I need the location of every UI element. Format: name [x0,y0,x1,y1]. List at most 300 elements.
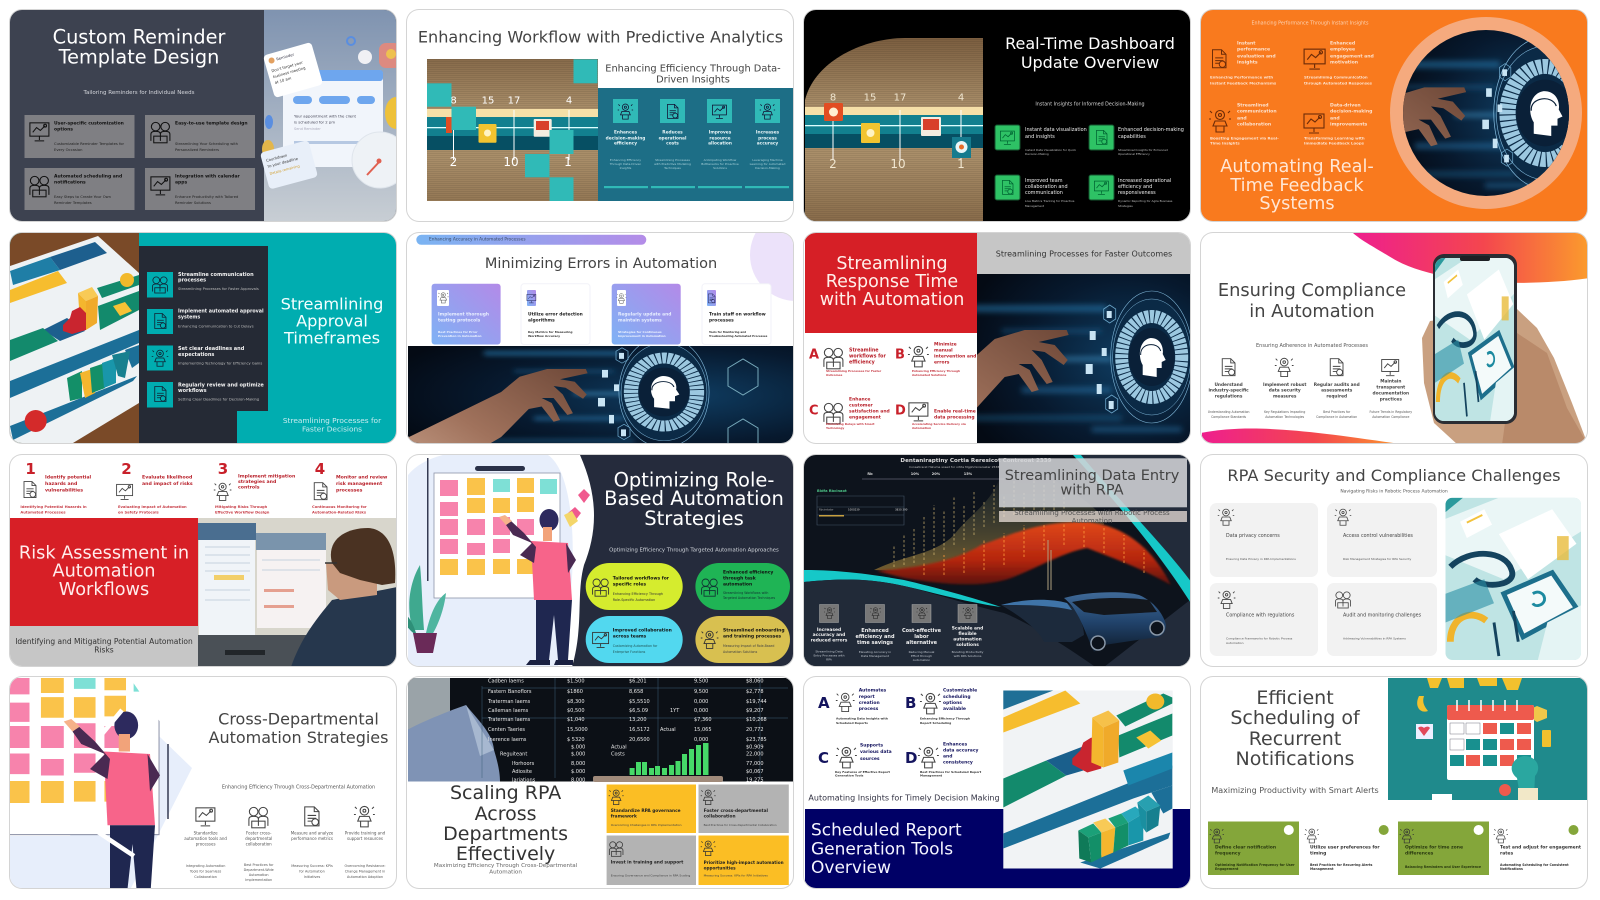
column: efficiency: Elevating Accuracy in [859,650,891,654]
photo: financial table on screen: Reguiteant [500,751,527,757]
item D [905,741,982,777]
step 3: controls [238,484,260,490]
box: automated scheduling [24,168,134,210]
title block: with Automation [820,290,964,310]
item: increased operational efficiency [1089,175,1173,208]
item D: Automation [912,426,931,430]
item A [818,687,888,724]
photo: 3D reminder interface: Send Reminder [294,127,321,131]
tile: notification frequency: Engagement [1215,866,1239,870]
column: scalable: with RPA Solutions [954,654,982,658]
timeline image: 15 [481,96,494,106]
chart image: particle terrain [874,455,1192,667]
tile: notification frequency: Optimizing Notification Frequency for User [1215,862,1295,866]
step 2: on Safety Protocols [118,510,159,514]
box: calendar integration: Enhance Productivity with Tailored [175,195,238,199]
photo: financial table on screen: Traterman Iaems [486,698,530,704]
column: audits: Regular audits and [1314,382,1360,388]
box: user-specific customization [24,115,134,158]
illustration: person at sticky-note board [400,450,590,666]
card: testing protocols: Implement thorough [438,311,488,317]
panel: insights: Insights [619,166,631,170]
panel: insights: Improves [708,130,731,136]
step 4: 4 [315,460,325,478]
title: RPA Security and Compliance Challenges [1227,466,1561,485]
photo: financial table on screen: $8,060 [746,678,763,684]
photo: 3D reminder interface: is scheduled for 2 pm [294,120,335,124]
photo: 3D reminder interface: Reminder [276,52,295,62]
item D: D [895,403,906,418]
subtitle: Maximizing Efficiency Through Cross-Departmental [433,862,577,868]
column: regulations: Understand [1214,382,1243,388]
subtitle box: Streamlining Processes with Robotic Process [1014,509,1170,517]
title block: Generation Tools [811,839,953,859]
step 3: Implement mitigation [238,474,295,480]
photo: financial table on screen: $23,785 [746,736,766,742]
timeline image: 2 [829,157,837,171]
dark list panel [139,246,268,444]
item C: C [818,748,829,766]
panel: Scheduled Report Generation Tools Overview [804,677,1190,888]
item B: options [943,700,962,706]
step 1: Identify potential [45,474,92,480]
item C: Minimizing Delays with Smart [826,422,875,426]
item: streamline communication [147,272,259,297]
item: streamlined communication: Streamlined [1237,102,1269,108]
item C: satisfaction and [849,408,890,414]
card: testing protocols [431,283,500,344]
column: cost: alternative [906,640,938,646]
panel: Minimizing Errors in Automation [407,232,793,443]
tile: audit: Addressing Vulnerabilities in RPA Systems [1343,637,1406,641]
column: training: Overcoming Resistance: [344,864,386,868]
column: training [344,806,386,878]
column: documentation: Maintain [1380,378,1401,384]
box: automated scheduling: notifications [54,180,86,186]
item: increased operational efficiency: Increased operational [1118,178,1171,184]
title [53,26,225,68]
photo: financial table on screen: Centen Taeries [488,726,525,732]
image: teal calendar illustration [1388,678,1590,800]
photo: financial table on screen: $0,500 [566,707,584,713]
step 4: processes [336,488,363,494]
chart labels: Bldfa Rbcinaot [817,489,847,493]
timeline image: 1 [564,155,571,169]
column: data security: Automation Technologies [1265,414,1305,418]
tile: training [606,835,696,884]
decorative lavender circle [750,208,842,300]
panel: RPA Security and Compliance Challenges [1201,455,1587,666]
column: foster: Automation [249,872,269,876]
step 3: Effective Workflow Design [215,510,270,514]
photo: financial table on screen: 0,000 [694,736,708,742]
column: standardize: processes [196,841,216,846]
title block: Workflows [59,580,149,600]
item: data-driven decision-making: decision-making [1330,108,1372,114]
step 2: 2 [121,460,132,478]
column: accuracy: Streamlining Data [815,650,843,654]
card: testing protocols: Best Practices for Error [438,330,478,334]
column: training: Automation Adoption [347,874,383,878]
tile: audit [1327,583,1437,656]
tile: data privacy: Data privacy concerns [1226,533,1280,539]
item: data-driven decision-making: Immediate Feedback Loops [1304,140,1365,146]
timeline image: 10 [890,157,906,171]
title: Recurrent [1249,728,1341,750]
title: Scheduling of [1230,706,1361,728]
column: cost: Automation [913,658,930,662]
panel: Optimizing Role-Based Automation Strategies [407,455,793,666]
photo: financial table on screen: $6,5.09 [628,707,648,713]
tile: time zones: Optimize for time zone [1405,844,1463,850]
item: review workflows [147,382,264,407]
eyebrow: Enhancing Performance Through Instant Insights [1252,20,1369,26]
column: regulations [1208,358,1250,418]
image: isometric chart [1003,690,1173,868]
column: accuracy [811,604,848,662]
box: user-specific customization: Every Occasion [54,148,83,152]
oval: tailored workflows [585,563,682,610]
step 2 [117,460,193,514]
tile: user preferences: Utilize user preferences for [1310,844,1380,850]
tile: access control: Risk Management Strategies for RPA Security [1343,557,1411,561]
timeline image: 2 [449,155,457,169]
box: automated scheduling: Automated scheduling and [54,174,122,180]
photo: financial table on screen: 8,658 [628,688,643,694]
photo: financial table on screen: $.000 [570,744,585,750]
title: Across [474,802,536,824]
item: increased operational efficiency: Strategies [1118,204,1133,208]
timeline image [805,38,983,221]
panel: insights: decision-making [605,136,645,142]
column: regulations: Compliance Standards [1211,414,1246,418]
subtitle: Maximizing Productivity with Smart Alerts [1211,786,1379,794]
column: cost: Effort through [911,654,932,658]
panel: Automating Real-Time Feedback Systems [1201,10,1587,220]
title block [804,808,1193,890]
photo: hand and headset [977,274,1190,443]
subtitle: Automating Insights for Timely Decision Making [808,793,1000,802]
card: update systems: maintain systems [618,317,662,323]
item B [895,341,976,376]
item: data-driven decision-making [1304,102,1372,146]
item: automated approval: Implement automated approval [178,308,264,314]
oval: streamlined onboarding [695,616,790,663]
panel: insights: Leveraging Machine [752,158,782,162]
item: enhanced decision-making: Streamlined Insights for Enhanced [1118,148,1168,152]
photo: financial table on screen: Actual [610,744,626,750]
card: error detection: algorithms [528,317,555,323]
column: scalable: automation [953,636,982,642]
chart labels: 1000239 [848,508,860,512]
chart labels: Dentaniraptiny Cortia Reresicot Contreoat 2339 [900,458,1052,464]
title: Departments [443,822,568,844]
oval: enhanced efficiency: Streamlining Workflows with [722,591,768,595]
timeline image: 1 [957,157,965,171]
photo: financial table on screen: $8,300 [566,698,584,704]
column: measure: for Automation [299,869,325,873]
item C: Enhance [849,396,870,402]
oval: streamlined onboarding: and training processes [722,634,781,640]
item: enhanced employee engagement: motivation [1330,60,1358,66]
panel: insights: Bottlenecks for Proactive [701,162,738,166]
item A: Outcomes [826,372,843,376]
timeline image: 4 [958,92,964,104]
dark background shape [572,455,796,667]
card: error detection: Key Metrics for Measuring [528,330,572,334]
column: standardize: Standardize [194,830,218,835]
oval: tailored workflows: Tailored workflows for [612,576,669,582]
box: automated scheduling: Reminder Templates [54,201,92,205]
subtitle block: Identifying and Mitigating Potential Automation [15,637,193,646]
card: train staff: Tools for Monitoring and [708,330,746,334]
item: instant performance evaluation: performance [1237,46,1270,52]
tile: user preferences: Management [1310,866,1334,870]
panel: insights: Reduces [662,130,683,136]
card: error detection: Utilize error detection [528,311,582,317]
title block: Scheduled Report [811,820,962,840]
oval: streamlined onboarding: Measuring Impact of Role-Based [722,644,774,648]
panel: insights: Learning for Automated [749,162,785,166]
panel: insights: resource [709,136,730,142]
oval: streamlined onboarding: Automation Solutions [722,650,757,654]
item C: Key Features of Effective Report [835,770,890,774]
column: accuracy: Increased [817,627,841,633]
item B [905,687,977,724]
tile: notification frequency: Define clear notification [1215,844,1276,850]
item B: Minimize [934,341,957,347]
photo: financial table on screen: $10,268 [746,716,766,722]
item: automated approval [147,308,264,334]
tile: user preferences: timing [1310,850,1326,856]
step 4: Continuous Monitoring for [312,505,367,509]
oval: tailored workflows: Enhancing Efficiency Through [612,592,663,596]
title [281,294,383,347]
item B: scheduling [943,694,971,700]
photo: financial table on screen: Inerence Iaems [488,736,526,742]
item B: Enhancing Efficiency Through [912,368,960,372]
eyebrow pill: Enhancing Accuracy in Automated Processes [428,236,526,242]
panel: insights: efficiency [613,140,637,146]
tile: user preferences: Best Practices for Recurring Alerts [1310,862,1372,866]
tile: engagement rates: Test and adjust for engagement [1500,844,1582,850]
column: standardize: Collaboration [194,874,217,878]
title: Template Design [58,46,219,68]
card: update systems: Improvement in Automation [618,334,665,338]
column: documentation: transparent [1376,384,1405,390]
item: enhanced employee engagement: employee [1330,46,1355,52]
item A: Streamline [849,347,879,353]
title: Update Overview [1021,53,1159,72]
box: user-specific customization: options [54,126,73,132]
item: review workflows: Setting Clear Deadlines for Decision-Making [178,397,259,401]
tile: prioritize: Prioritize high-impact automation [703,860,783,864]
photo: financial table on screen: $9,207 [746,707,763,713]
subtitle [283,416,382,433]
item: instant data visualization: and insights [1025,134,1055,140]
column: efficiency [855,604,895,658]
title block: Overview [811,858,891,878]
oval: enhanced efficiency: automation [722,582,752,588]
title block [10,518,198,626]
column: standardize: Tools for Seamless [189,869,222,873]
item B: manual [934,347,953,353]
panel: insights: with Predictive Modeling [654,162,690,166]
step 1 [20,460,92,514]
photo: financial table on screen: 1YT [670,707,680,713]
oval: improved collaboration: Improved collaboration [612,628,671,634]
subtitle: Streamlining Processes for [283,416,382,424]
item B: Report Scheduling [920,720,951,724]
item: improved team collaboration: Management [1025,204,1045,208]
photo: financial table on screen: Iforhoors [512,760,534,766]
photo: financial table on screen: $.000 [570,768,585,774]
title: Real-Time Dashboard [1005,34,1175,53]
item C: engagement [849,414,882,420]
column: efficiency: time savings [857,640,893,646]
title: in Automation [1249,300,1375,322]
chart labels: 15% [964,472,973,476]
photo: financial table on screen: $6,201 [628,678,646,684]
step 1: 1 [25,460,36,478]
card: update systems [611,283,680,344]
column: foster: departmental [245,836,272,840]
card: train staff [702,283,770,344]
grey header: Streamlining Processes for Faster Outcomes [996,249,1172,258]
photo: financial table on screen: 0,000 [694,707,708,713]
panel: insights: Enhances [613,130,637,136]
column: audits: required [1326,393,1347,399]
item: clear deadlines: Implementing Technology for Efficiency Gains [178,361,262,365]
step 2: Evaluating Impact of Automation [118,505,187,509]
item B: available [943,706,966,712]
panel: Risk Assessment in Automation Workflows [10,455,396,666]
item D: Enable real-time [934,408,976,414]
item: enhanced employee engagement: Enhanced [1330,40,1355,46]
photo: financial table on screen: 19,275 [746,777,763,783]
item: instant data visualization [995,125,1087,156]
photo: financial table on screen: Cadben Iaems [488,678,524,684]
photo: 3D reminder interface [260,10,408,222]
subtitle block [10,626,198,667]
photo: financial table on screen: Iariations [512,777,535,783]
item A: workflows for [849,353,886,359]
item: data-driven decision-making: improvements [1330,122,1368,128]
item: instant performance evaluation: Instant [1237,40,1256,46]
item: improved team collaboration: Improved team [1025,178,1063,184]
title block: Risk Assessment in [19,543,189,563]
column: measure: Measuring Success: KPIs [291,864,333,868]
panel: Scaling RPA Across Departments Effectively [407,677,793,888]
item: increased operational efficiency: efficiency and [1118,184,1152,190]
timeline image: 8 [450,96,456,106]
column: foster: Foster cross- [246,830,272,835]
panel: Enhancing Workflow with Predictive Analytics [407,10,793,220]
photo: financial table on screen: 77,000 [746,760,763,766]
item B: intervention and [934,353,976,359]
item: review workflows: Regularly review and optimize [178,382,264,388]
chart labels: Consatiraret Hatuma sosed for ortite Mgphminiaraster 2538 [909,465,999,469]
column: regulations: regulations [1215,393,1243,399]
item: improved team collaboration: collaboration and [1025,184,1068,190]
panel: insights: Anticipating Workflow [703,158,736,162]
box: easy-to-use template design: Personalized Reminders [175,148,219,152]
item A: report [859,694,876,700]
card: update systems: Strategies for Continuous [618,330,661,334]
column: foster [244,807,274,882]
card: testing protocols: testing protocols [438,317,480,323]
photo: 3D reminder interface: Countdown [265,152,288,163]
title: Efficient [1256,686,1334,708]
photo: financial table on screen: 22,000 [746,751,763,757]
title box [999,458,1187,507]
column: scalable: Scalable and [952,626,983,632]
oval: improved collaboration: Enterprise Functions [612,650,645,654]
item D: D [905,748,917,766]
chart labels: Rb [867,472,873,476]
photo: financial table on screen: Calleman Iaems [488,707,528,713]
item: streamlined communication: communication [1237,108,1277,114]
tile: prioritize: opportunities [703,865,736,870]
item: clear deadlines [147,345,262,370]
tile: foster: Foster cross-departmental [703,808,768,814]
photo: financial table on screen: 9,500 [694,678,708,684]
column: data security [1263,358,1306,418]
photo: financial table on screen: 8,000 [570,777,585,783]
photo: financial table on screen: Costs [610,751,625,757]
column: regulations: Understanding Automation [1208,410,1250,414]
tile: data privacy: Ensuring Data Privacy in RPA Implementations [1226,557,1296,561]
title box: Streamlining Data Entry [1005,468,1180,484]
item: instant data visualization: Decision-Making [1025,152,1049,156]
item: instant performance evaluation: evaluation and [1237,54,1276,60]
title block: Automation [52,562,156,582]
tile: time zones: Balancing Reminders and User Experience [1405,864,1481,868]
column: accuracy: Entry Processes with [813,654,845,658]
oval: improved collaboration [585,616,682,663]
tile: prioritize [698,835,788,884]
step 2: and impact of risks [142,481,193,487]
item: enhanced decision-making: Enhanced decision-making [1118,127,1184,133]
item A: Automates [859,687,887,693]
item D [895,402,976,430]
column: cost: Reducing Manual [909,650,935,654]
item: improved team collaboration: Live Metrics Tracking for Proactive [1025,199,1075,203]
column: cost [902,604,942,662]
item A: Automating Data Insights with [836,716,888,720]
column: training: Change Management in [345,869,385,873]
title [209,709,388,746]
title: Optimizing Role- [613,468,774,492]
item: data-driven decision-making: and [1330,116,1340,122]
oval: enhanced efficiency: Enhanced efficiency [722,570,773,576]
column: audits: Best Practices for [1323,410,1351,414]
column: regulations: industry-specific [1208,387,1249,393]
title: Automating Real- [1220,157,1374,177]
photo: cars [1001,592,1166,652]
item: clear deadlines: Set clear deadlines and [178,346,245,352]
timeline image: 17 [507,96,520,106]
heading [605,64,781,86]
chart labels [817,458,1052,525]
column: foster: collaboration [246,841,272,846]
item B: Automated Solutions [912,372,947,376]
box: user-specific customization: Customizable Reminder Templates for [54,142,125,146]
photo: financial table on screen: 9,500 [694,688,708,694]
title [1005,34,1175,72]
item: automated approval: Enhancing Communication to Cut Delays [178,324,254,328]
photo: financial table on screen: $5,5510 [628,698,649,704]
